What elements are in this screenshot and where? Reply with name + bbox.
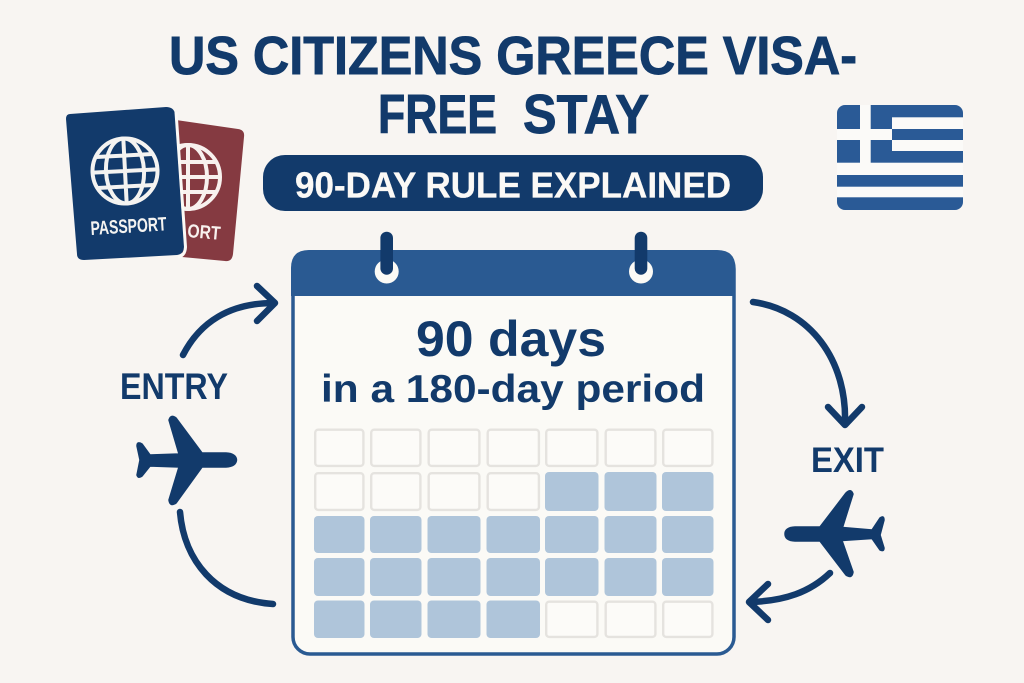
arrow: exit bottom — [749, 573, 830, 620]
entry label: ENTRY — [120, 366, 228, 407]
calendar — [291, 232, 736, 654]
title: FREE — [378, 83, 497, 145]
exit label: EXIT — [811, 441, 884, 480]
subtitle pill — [263, 155, 763, 211]
highlighted days — [314, 472, 714, 638]
icon: entry plane — [137, 416, 236, 504]
calendar body — [293, 252, 734, 654]
calendar header — [291, 250, 736, 296]
icon: passports — [66, 107, 244, 261]
title — [169, 26, 857, 145]
title: US CITIZENS GREECE VISA- — [169, 26, 857, 86]
ring right — [629, 232, 653, 284]
heading: 90 days: 90 days — [416, 311, 606, 367]
ring left — [375, 232, 399, 284]
blue passport — [66, 107, 186, 260]
blue passport: PASSPORT — [90, 213, 167, 240]
red passport — [156, 120, 244, 261]
calendar grid — [314, 430, 714, 638]
icon: Greek flag — [837, 105, 963, 210]
arrow: entry bottom curve — [180, 512, 273, 604]
arrow: exit top — [753, 302, 862, 425]
subheading: 180-day period: in a 180-day period — [321, 368, 705, 411]
subtitle pill: 90-DAY RULE EXPLAINED — [295, 164, 731, 206]
title: STAY — [523, 83, 649, 145]
red passport: ORT — [187, 221, 222, 245]
icon: exit plane — [785, 491, 884, 576]
arrow: entry top — [183, 286, 275, 355]
empty days — [315, 430, 712, 637]
